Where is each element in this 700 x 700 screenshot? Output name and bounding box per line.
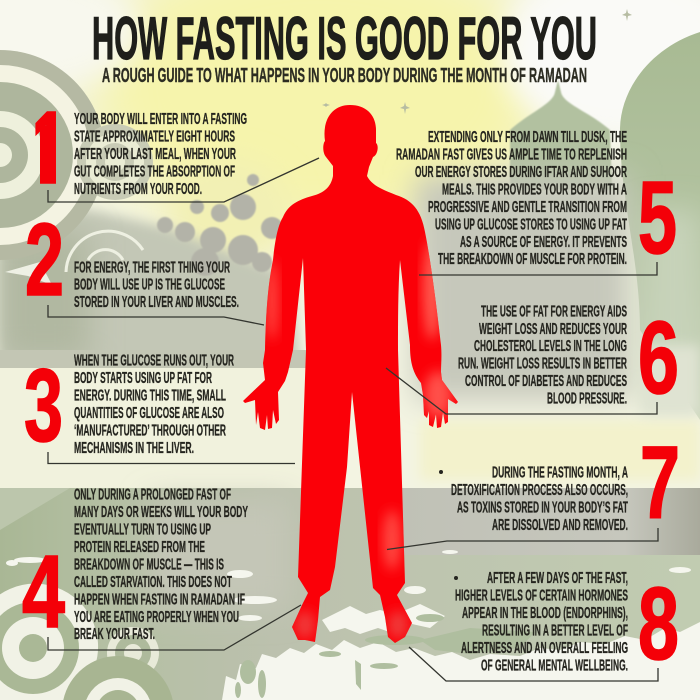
step 7	[439, 425, 680, 540]
step 3: BODY STARTS USING UP FAT FOR	[74, 370, 212, 387]
step 4: PROTEIN RELEASED FROM THE	[74, 539, 205, 556]
step 3: 3	[24, 348, 63, 463]
step 3: ENERGY. DURING THIS TIME, SMALL	[74, 388, 226, 404]
step 3: WHEN THE GLUCOSE RUNS OUT, YOUR	[74, 352, 234, 370]
sparkles	[322, 9, 632, 114]
step 4: HAPPEN WHEN FASTING IN RAMADAN IF	[74, 592, 245, 608]
step 2: STORED IN YOUR LIVER AND MUSCLES.	[74, 294, 239, 311]
step 1: STATE APPROXIMATELY EIGHT HOURS	[74, 128, 235, 146]
step 1: YOUR BODY WILL ENTER INTO A FASTING	[74, 111, 247, 128]
step 1: NUTRIENTS FROM YOUR FOOD.	[74, 181, 202, 198]
step 4: BREAK YOUR FAST.	[74, 626, 155, 643]
step 4: 4	[22, 534, 65, 649]
callout lines	[48, 158, 658, 681]
red human body silhouette	[240, 100, 460, 650]
step 2: 2	[25, 202, 64, 317]
step 6: BLOOD PRESSURE.	[547, 390, 627, 408]
step 1	[35, 111, 247, 194]
concentric circles top left	[0, 50, 153, 260]
step 2	[25, 202, 239, 317]
step 8	[454, 566, 679, 681]
step 1: AFTER YOUR LAST MEAL, WHEN YOUR	[74, 146, 236, 163]
step 4: MANY DAYS OR WEEKS WILL YOUR BODY	[74, 504, 248, 521]
step 4: CALLED STARVATION. THIS DOES NOT	[74, 574, 232, 591]
step 4: YOU ARE EATING PROPERLY WHEN YOU	[74, 609, 239, 626]
step 3: MECHANISMS IN THE LIVER.	[74, 440, 194, 457]
step 8: 8	[638, 566, 679, 681]
step 4	[22, 486, 248, 649]
step 1: GUT COMPLETES THE ABSORPTION OF	[74, 164, 235, 180]
step 5: 5	[638, 160, 677, 275]
step 6	[458, 300, 679, 415]
step 3: QUANTITIES OF GLUCOSE ARE ALSO	[74, 405, 224, 422]
horizontal bands	[0, 345, 700, 700]
step 6: 6	[638, 300, 679, 415]
step 3	[24, 348, 234, 463]
step 1: 1	[32, 90, 68, 205]
step 4: ONLY DURING A PROLONGED FAST OF	[74, 486, 231, 504]
mosque domes	[415, 32, 700, 420]
bottom circles and splashes	[0, 550, 700, 700]
step 2: FOR ENERGY, THE FIRST THING YOUR	[74, 260, 230, 276]
step 2: BODY WILL USE UP IS THE GLUCOSE	[74, 276, 225, 294]
arcs and blobs	[5, 174, 283, 285]
step 4: BREAKDOWN OF MUSCLE — THIS IS	[74, 556, 224, 574]
step 7: 7	[640, 425, 680, 540]
step 5	[396, 129, 677, 275]
step 3: ‘MANUFACTURED’ THROUGH OTHER	[74, 422, 226, 440]
step 4: EVENTUALLY TURN TO USING UP	[74, 522, 211, 538]
